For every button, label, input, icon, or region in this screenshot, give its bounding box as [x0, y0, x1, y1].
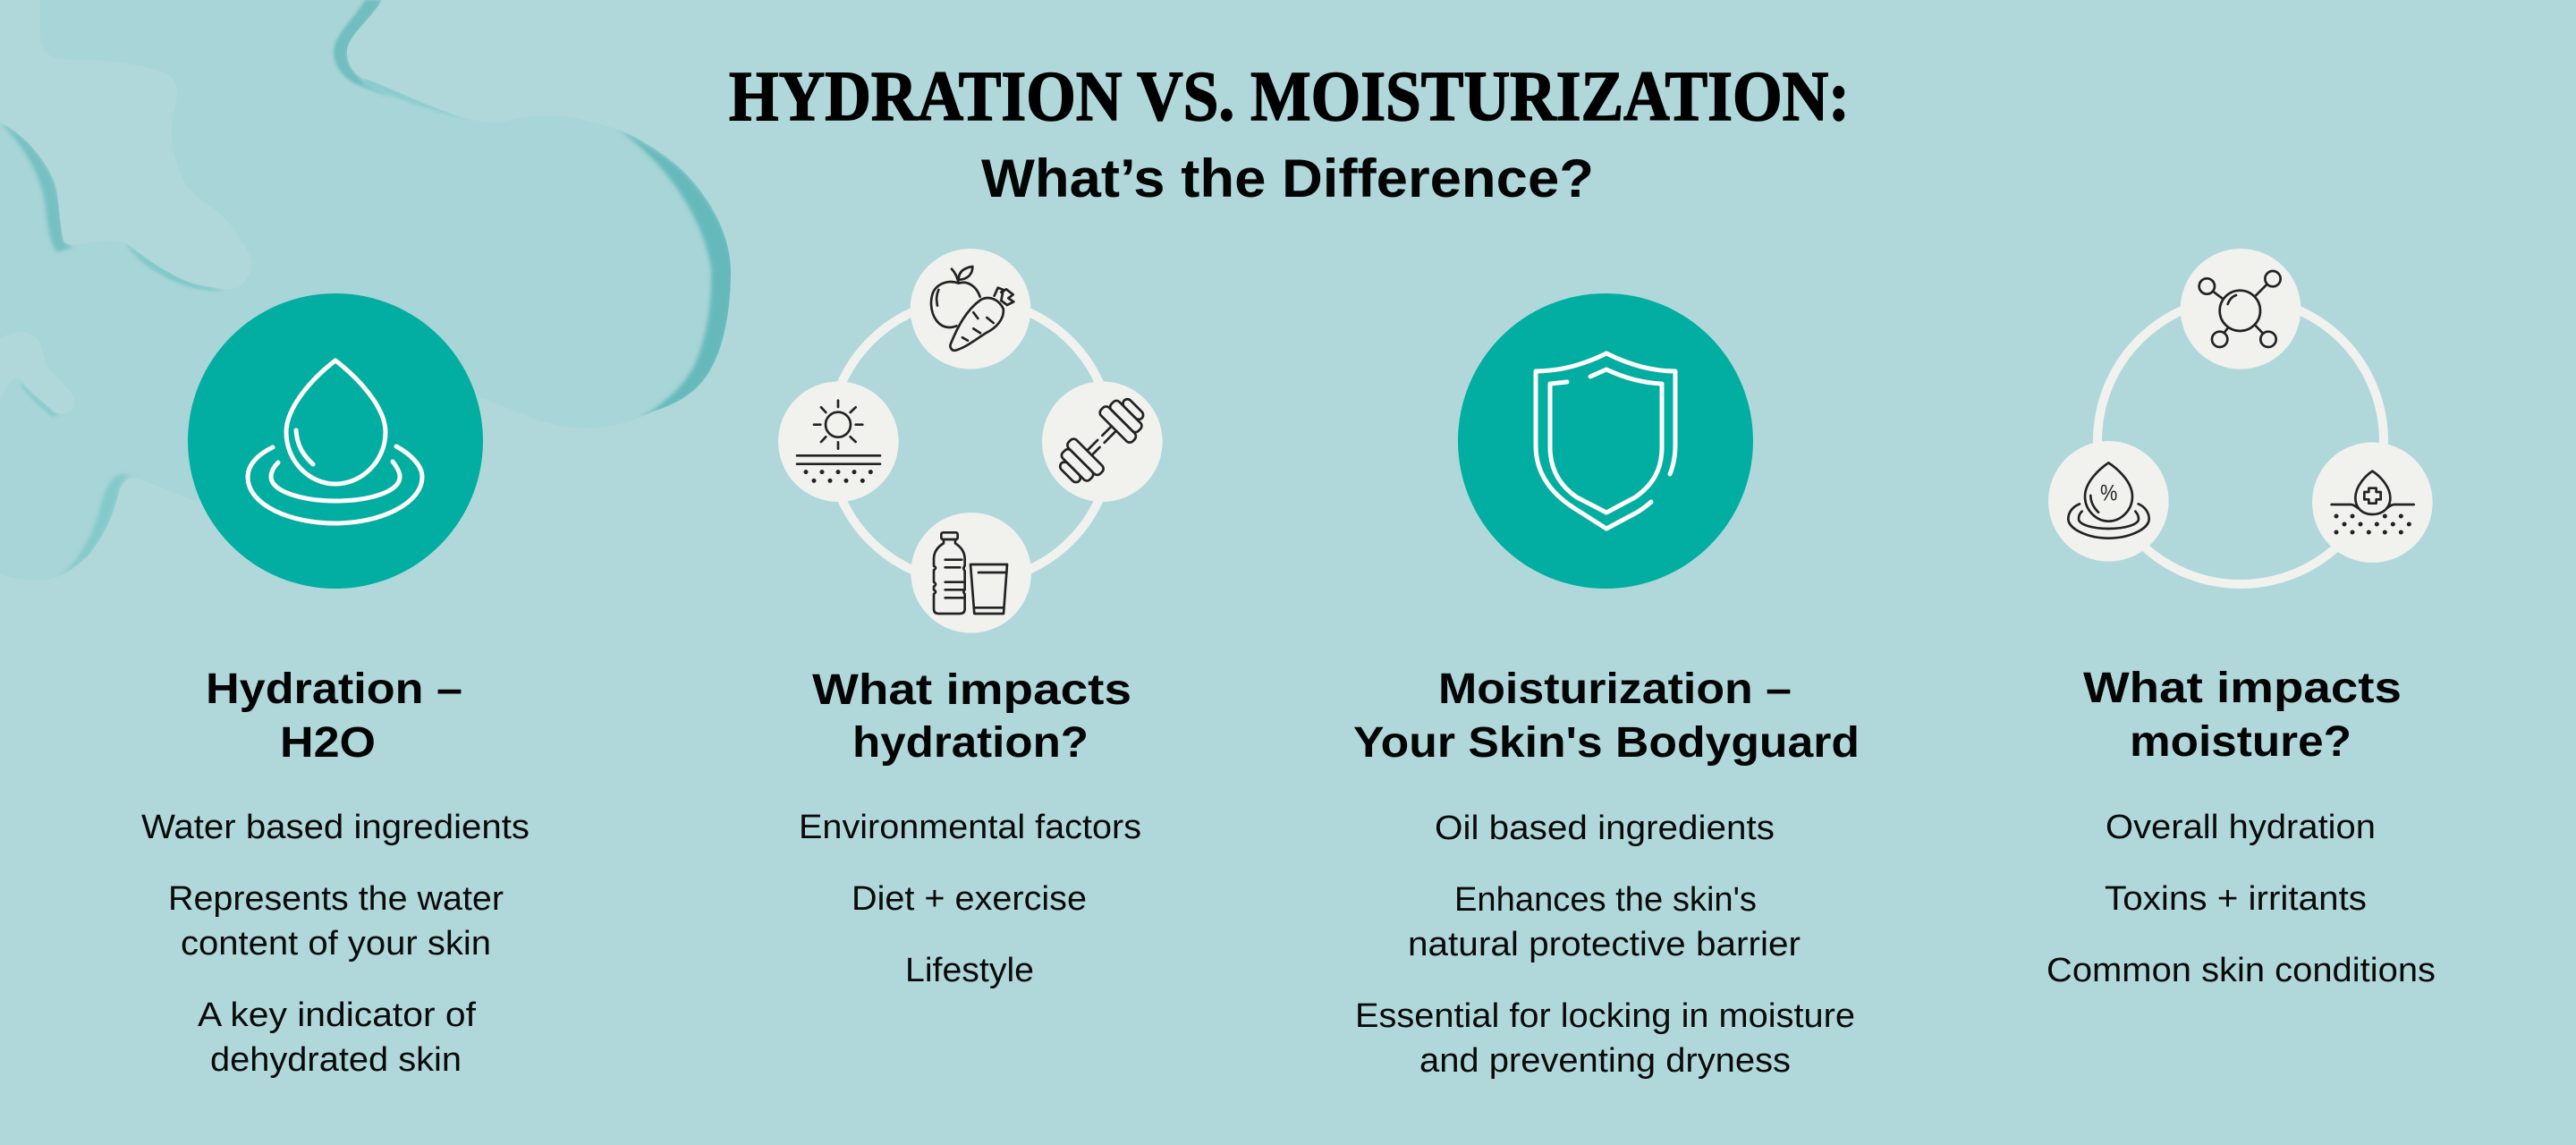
- heading: what impacts hydration: [812, 666, 1131, 767]
- text block: moisture factors: Overall hydration: [2106, 809, 2376, 846]
- text block: hydration points: Water based ingredients: [141, 809, 530, 846]
- text block: hydration points: Represents the water: [168, 880, 504, 918]
- text block: hydration factors: [799, 809, 1141, 989]
- text block: moisture factors: Common skin conditions: [2046, 952, 2436, 989]
- text block: hydration points: [141, 809, 530, 1079]
- text block: hydration points: A key indicator of: [198, 997, 476, 1034]
- icon: sun over skin layers: [778, 381, 899, 502]
- heading: hydration: H2O: [280, 719, 376, 767]
- icon: skin repair drop: [2312, 442, 2433, 563]
- icon: water percentage drop: %: [2100, 480, 2117, 505]
- icon: dumbbell: [1042, 381, 1163, 502]
- panel: what impacts hydration: [778, 249, 1163, 989]
- text block: moisturization points: Enhances the skin's: [1454, 881, 1757, 919]
- title: [729, 58, 1850, 208]
- text block: moisturization points: natural protective barrier: [1408, 926, 1801, 963]
- text block: hydration points: content of your skin: [181, 925, 491, 963]
- text block: moisture factors: [2046, 809, 2436, 989]
- text block: moisture factors: Toxins + irritants: [2105, 880, 2367, 918]
- background: liquid gel blob: [0, 0, 733, 581]
- heading: what impacts moisture: moisture?: [2130, 718, 2351, 766]
- subtitle: What’s the Difference?: [981, 148, 1594, 208]
- heading: what impacts hydration: What impacts: [812, 666, 1131, 714]
- text block: moisturization points: [1355, 810, 1855, 1080]
- heading: what impacts moisture: What impacts: [2083, 665, 2402, 712]
- main heading: HYDRATION VS. MOISTURIZATION:: [729, 58, 1850, 136]
- text block: hydration factors: Diet + exercise: [852, 880, 1087, 918]
- heading: moisturization: Your Skin's Bodyguard: [1353, 719, 1860, 767]
- panel: moisturization: [1353, 293, 1860, 1080]
- heading: what impacts moisture: [2083, 665, 2402, 766]
- heading: hydration: [206, 666, 462, 767]
- heading: moisturization: Moisturization –: [1438, 666, 1792, 713]
- text block: hydration points: dehydrated skin: [210, 1041, 462, 1079]
- panel: hydration: [141, 293, 530, 1079]
- diagram: hydration factor ring: [778, 249, 1163, 633]
- icon: molecule: [2181, 249, 2301, 369]
- heading: what impacts hydration: hydration?: [852, 719, 1089, 767]
- icon: apple and carrot: [911, 249, 1030, 369]
- text block: hydration factors: Environmental factors: [799, 809, 1141, 846]
- text block: moisturization points: and preventing dryness: [1419, 1042, 1791, 1080]
- icon: water percentage drop: [2048, 441, 2169, 562]
- panel: what impacts moisture: [2046, 249, 2436, 989]
- text block: hydration factors: Lifestyle: [905, 952, 1034, 989]
- icon: water bottle and glass: [911, 513, 1031, 633]
- icon: shield: [1458, 293, 1753, 589]
- heading: hydration: Hydration –: [206, 666, 462, 713]
- diagram: moisture factor ring: [2048, 249, 2433, 584]
- text block: moisturization points: Oil based ingredients: [1435, 810, 1775, 847]
- text block: moisturization points: Essential for locking in moisture: [1355, 997, 1855, 1035]
- heading: moisturization: [1353, 666, 1860, 767]
- icon: water drop with ripples: [188, 293, 483, 589]
